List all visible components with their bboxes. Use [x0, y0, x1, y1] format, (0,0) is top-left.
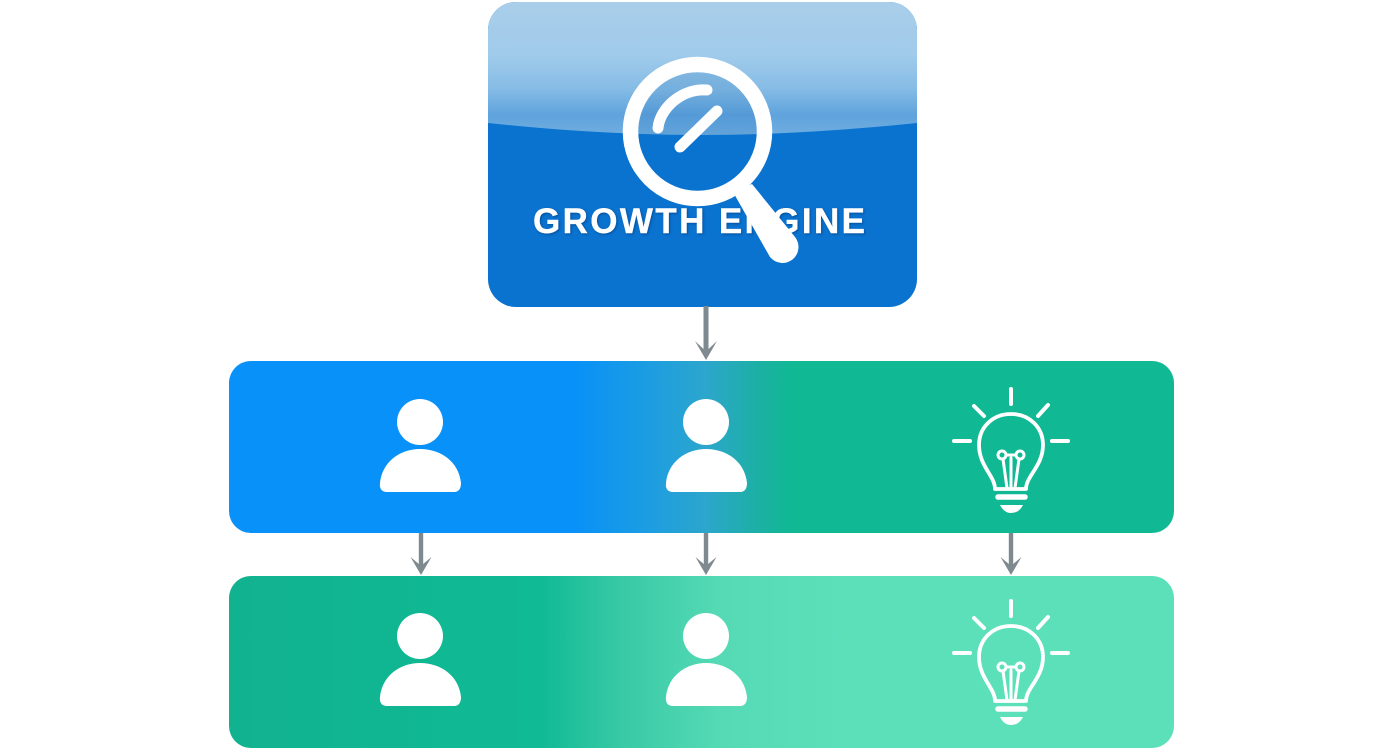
panel: top row	[229, 361, 1174, 533]
icon: magnifying glass	[630, 60, 798, 263]
arrow: left, top row to bottom row	[410, 533, 432, 575]
icon: person left, top row	[380, 399, 461, 492]
icon: light bulb, bottom row	[954, 601, 1068, 725]
panel: growth engine card	[488, 2, 917, 307]
icon: light bulb, top row	[954, 389, 1068, 513]
arrow: right, top row to bottom row	[1000, 533, 1022, 575]
arrow: card to top row	[695, 306, 717, 360]
card gloss highlight	[488, 2, 917, 135]
panel: bottom row	[229, 576, 1174, 748]
arrow: middle, top row to bottom row	[696, 533, 716, 575]
icon: person left, bottom row	[380, 613, 461, 706]
heading: growth engine: GROWTH ENGINE	[533, 202, 865, 241]
icon: person middle, top row	[666, 399, 747, 492]
icon: person middle, bottom row	[666, 613, 747, 706]
